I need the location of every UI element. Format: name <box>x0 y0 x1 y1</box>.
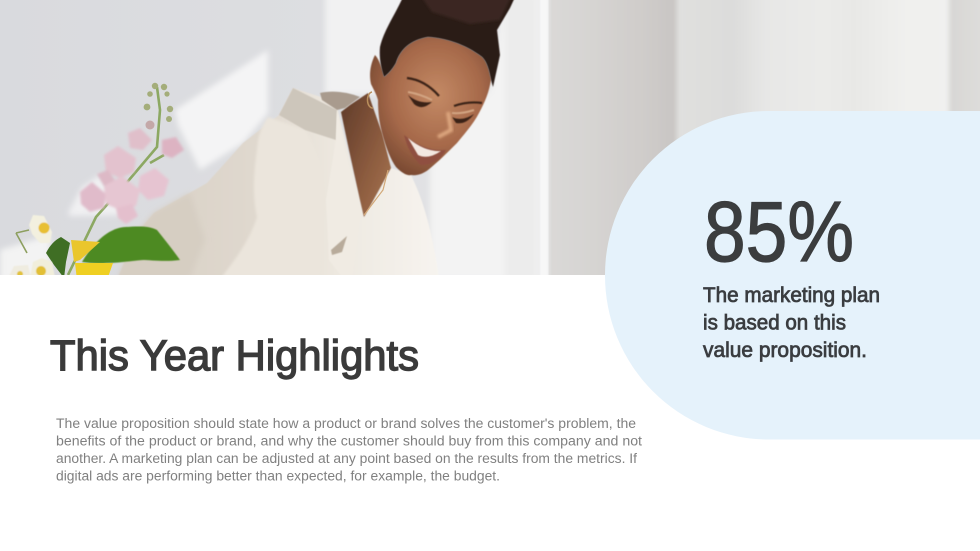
body paragraph: digital ads are performing better than expected, for example, the budget. <box>56 468 500 484</box>
callout text <box>703 284 880 362</box>
dark leaf <box>46 237 70 278</box>
body paragraph: benefits of the product or brand, and why the customer should buy from this company and not <box>56 434 642 448</box>
lapel <box>336 113 338 140</box>
sunlight patches on wall <box>0 0 549 280</box>
back of collar <box>320 92 360 110</box>
callout text: is based on this <box>703 312 846 334</box>
panel background <box>605 111 980 440</box>
curtains <box>549 0 980 280</box>
nose <box>438 112 451 137</box>
pink blossoms <box>80 128 184 224</box>
shaded lower body <box>118 194 186 274</box>
leaves <box>82 226 180 263</box>
callout text: The marketing plan <box>703 284 880 307</box>
wall background <box>0 0 550 275</box>
flowers <box>8 83 184 280</box>
callout text: value proposition. <box>703 339 867 362</box>
lips <box>404 135 446 165</box>
neck and chest <box>341 93 391 217</box>
big number: 85% <box>704 185 854 280</box>
yellow petals <box>71 240 100 262</box>
body paragraph <box>56 416 642 484</box>
buds <box>144 83 173 130</box>
body paragraph: another. A marketing plan can be adjusted at any point based on the results from the metrics. If <box>56 451 637 466</box>
earring <box>367 92 373 108</box>
callout panel: 85% stat <box>605 111 980 440</box>
photo: woman with flowers <box>0 0 980 280</box>
collar flap <box>279 88 337 140</box>
shirt <box>118 88 439 278</box>
brows <box>407 78 482 106</box>
sleeve highlight <box>224 118 282 275</box>
eyes <box>408 95 474 123</box>
daffodils <box>8 215 55 278</box>
body paragraph: The value proposition should state how a product or brand solves the customer's problem, the <box>56 416 636 431</box>
stems <box>68 87 164 275</box>
title: This Year Highlights <box>50 332 419 380</box>
hair <box>380 0 516 87</box>
face <box>367 37 491 175</box>
